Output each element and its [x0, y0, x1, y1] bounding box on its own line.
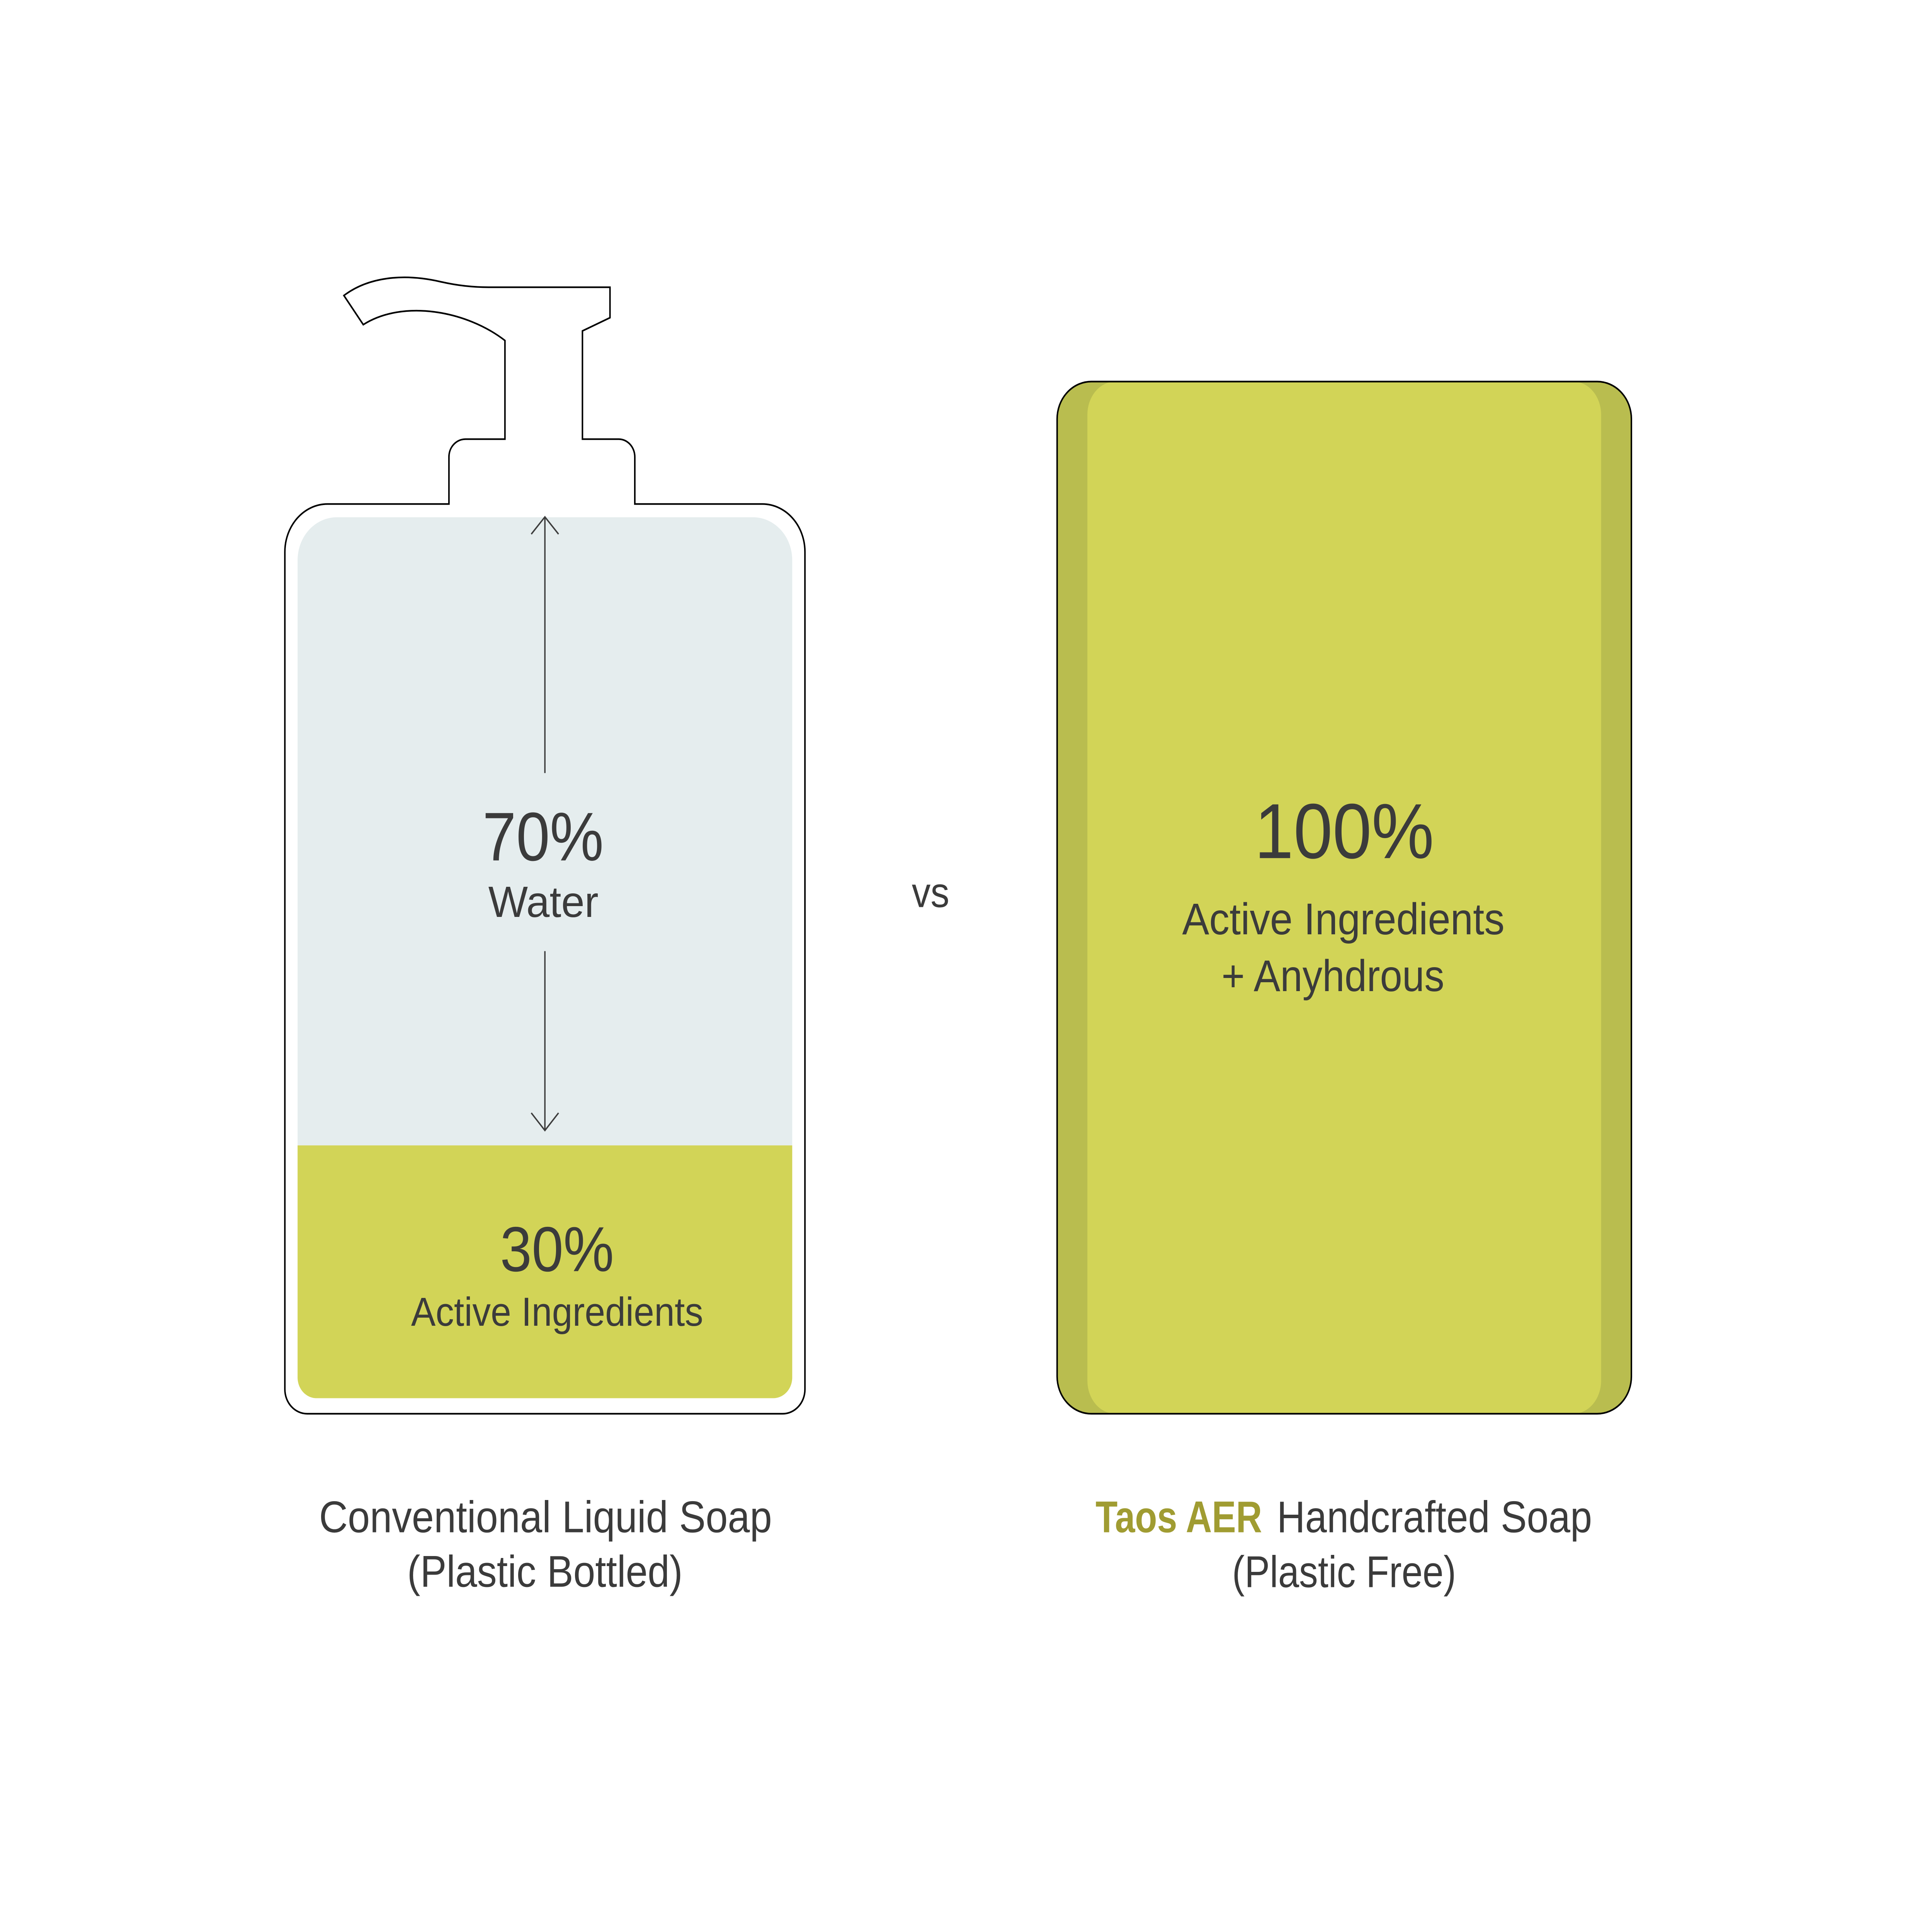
soap bar side shading: [1057, 381, 1631, 1414]
vs label: vs: [912, 869, 949, 917]
bottle and pump outline: [285, 277, 805, 1414]
caption: conventional liquid soap: Conventional Liquid Soap: [319, 1492, 772, 1542]
soap bar outline: [1057, 381, 1631, 1414]
arrow: up to top of water: [531, 517, 558, 773]
30 percent label: 30%: [500, 1214, 614, 1285]
active ingredients fill: [298, 1145, 792, 1398]
water label: Water: [488, 878, 599, 926]
caption: conventional liquid soap: (Plastic Bottled): [407, 1547, 683, 1597]
panel: conventional liquid soap bottle: [285, 277, 805, 1414]
caption: Taos AER handcrafted soap: [1095, 1492, 1592, 1597]
arrow: down to water level: [531, 951, 558, 1131]
water fill: [298, 517, 792, 1145]
caption: conventional liquid soap: [319, 1492, 772, 1597]
100 percent label: 100%: [1255, 788, 1434, 875]
caption: Taos AER handcrafted soap: Taos AER: [1095, 1492, 1262, 1542]
caption: Taos AER handcrafted soap: Handcrafted Soap: [1277, 1492, 1592, 1542]
caption: Taos AER handcrafted soap: (Plastic Free): [1232, 1547, 1456, 1597]
anhydrous label: + Anyhdrous: [1221, 951, 1444, 1001]
panel: Taos AER soap bar: [1057, 381, 1631, 1414]
active ingredients label: Active Ingredients: [1182, 894, 1505, 944]
active ingredients label: Active Ingredients: [411, 1289, 703, 1335]
70 percent label: 70%: [483, 798, 604, 875]
soap bar front face: [1087, 381, 1601, 1414]
